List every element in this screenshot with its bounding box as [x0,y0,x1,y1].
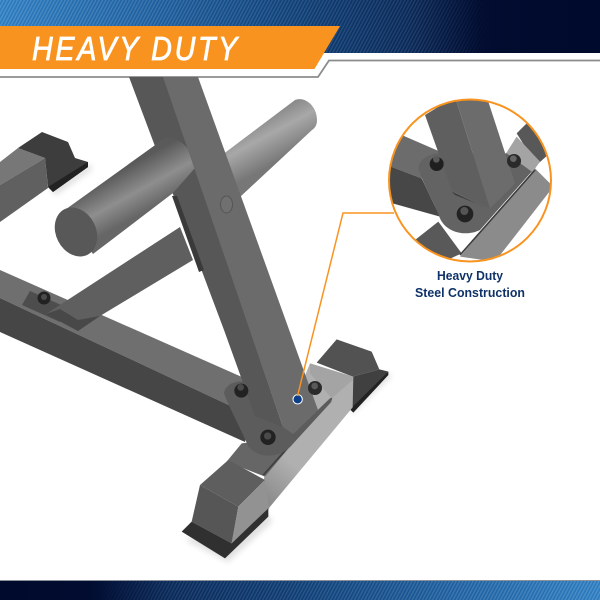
title banner [0,26,340,69]
rail bolt [38,292,50,304]
callout caption [415,268,525,300]
callout caption: Heavy Duty [437,268,504,283]
foot hardware [182,381,322,558]
front crossbeam and mounting plate [224,339,388,508]
front cap [182,460,269,558]
inset bolts [430,154,521,222]
header white ribbon with grey edge [0,53,600,77]
upright post [129,77,283,427]
brace [46,227,193,331]
left rear foot [0,132,88,222]
rear peg section [222,99,317,197]
callout anchor dot [293,395,302,404]
footer band [0,580,600,600]
plate bolts [234,381,322,445]
inset plate [418,153,532,233]
title: HEAVY DUTY [32,30,240,67]
inset cap [516,124,546,164]
callout line [298,213,394,396]
weight rack product photo [0,77,392,562]
mounting plate [224,381,332,456]
inset left rail [387,135,462,263]
inset detail circle [387,97,553,263]
rear cap [317,339,388,413]
inset post [425,97,515,208]
callout caption: Steel Construction [415,285,525,300]
base rail [0,270,260,442]
inset beam [460,168,553,262]
header band [0,0,600,53]
post bolt [220,196,232,213]
post front face [163,77,318,434]
floor shadows [50,164,392,562]
post gusset edge [172,196,204,272]
front peg section [47,138,195,264]
crossbeam [264,363,353,508]
